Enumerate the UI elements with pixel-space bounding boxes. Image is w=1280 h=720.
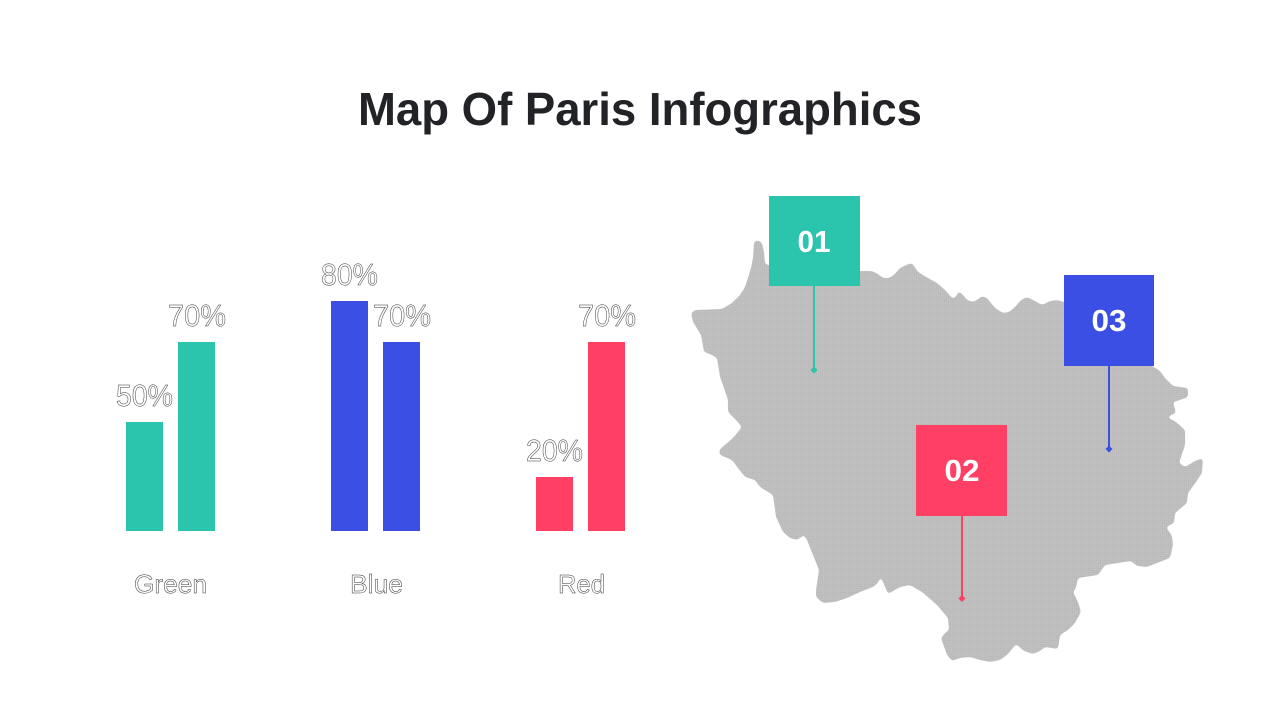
bar: green 70% bbox=[178, 342, 215, 531]
infographic canvas bbox=[116, 92, 1203, 662]
bar: red 20% bbox=[536, 477, 573, 531]
pin line 03 bbox=[1108, 366, 1110, 449]
bar chart: blue bbox=[321, 257, 431, 599]
title: Map Of Paris Infographics bbox=[358, 83, 922, 135]
marker 02 bbox=[916, 425, 1007, 602]
pin line 01 bbox=[813, 286, 815, 370]
number 01: 01 bbox=[798, 224, 830, 259]
bar: blue 70% bbox=[383, 342, 420, 531]
bar chart: red bbox=[526, 298, 636, 599]
number 02: 02 bbox=[944, 453, 980, 488]
label box 03 bbox=[1064, 275, 1154, 366]
value: 70%: 70% bbox=[373, 298, 431, 333]
value: 20%: 20% bbox=[526, 433, 583, 468]
value: 70%: 70% bbox=[168, 298, 226, 333]
map of Paris region bbox=[690, 238, 1205, 664]
pin diamond 03 bbox=[1106, 446, 1112, 452]
number 03: 03 bbox=[1092, 303, 1126, 338]
label box 02 bbox=[916, 425, 1007, 516]
category label: Blue: Blue bbox=[350, 569, 403, 599]
marker 01 bbox=[769, 196, 860, 374]
label box 01 bbox=[769, 196, 860, 286]
bar: green 50% bbox=[126, 422, 163, 531]
bar chart: green bbox=[116, 298, 226, 599]
pin line 02 bbox=[961, 516, 963, 598]
category label: Red: Red bbox=[558, 569, 605, 599]
value: 70%: 70% bbox=[578, 298, 636, 333]
bar: blue 80% bbox=[331, 301, 368, 531]
category label: Green: Green bbox=[134, 569, 207, 599]
pin diamond 02 bbox=[958, 595, 966, 602]
value: 50%: 50% bbox=[116, 378, 173, 413]
bar: red 70% bbox=[588, 342, 625, 531]
pin diamond 01 bbox=[810, 366, 818, 374]
marker 03 bbox=[1064, 275, 1154, 452]
value: 80%: 80% bbox=[321, 257, 378, 292]
